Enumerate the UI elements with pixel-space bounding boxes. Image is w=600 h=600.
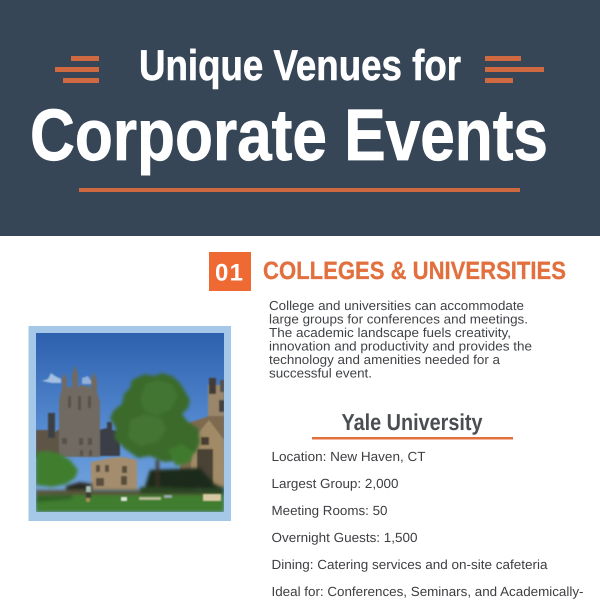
section description: technology and amenities needed for a: [269, 352, 501, 367]
venue details: [272, 449, 584, 599]
detail: largest group: Largest Group: 2,000: [272, 476, 398, 491]
detail: ideal for: Ideal for: Conferences, Seminars, and Academically-: [272, 584, 584, 599]
detail: location: Location: New Haven, CT: [272, 449, 426, 464]
section description: successful event.: [269, 366, 372, 380]
section description: innovation and productivity and provides the: [269, 338, 532, 354]
section number badge: [209, 252, 251, 291]
section description: The academic landscape fuels creativity,: [269, 325, 511, 340]
section description: [269, 298, 532, 380]
detail: overnight guests: Overnight Guests: 1,500: [272, 530, 418, 545]
venue name underline: [312, 437, 513, 440]
section description: large groups for conferences and meetings.: [269, 312, 528, 326]
detail: dining: Dining: Catering services and on-site cafeteria: [272, 557, 548, 572]
section description: College and universities can accommodate: [269, 298, 524, 313]
section number badge: 01: [215, 260, 243, 286]
detail: meeting rooms: Meeting Rooms: 50: [272, 503, 388, 518]
venue name: Yale University: [342, 409, 483, 435]
section heading: COLLEGES & UNIVERSITIES: [263, 257, 566, 285]
icon: right speed lines: [485, 56, 544, 83]
icon: left speed lines: [55, 56, 99, 83]
header banner: [0, 0, 600, 236]
photo: Yale University campus: [28, 326, 231, 521]
title line 1: Unique Venues for: [139, 42, 461, 90]
title underline: [79, 188, 520, 192]
